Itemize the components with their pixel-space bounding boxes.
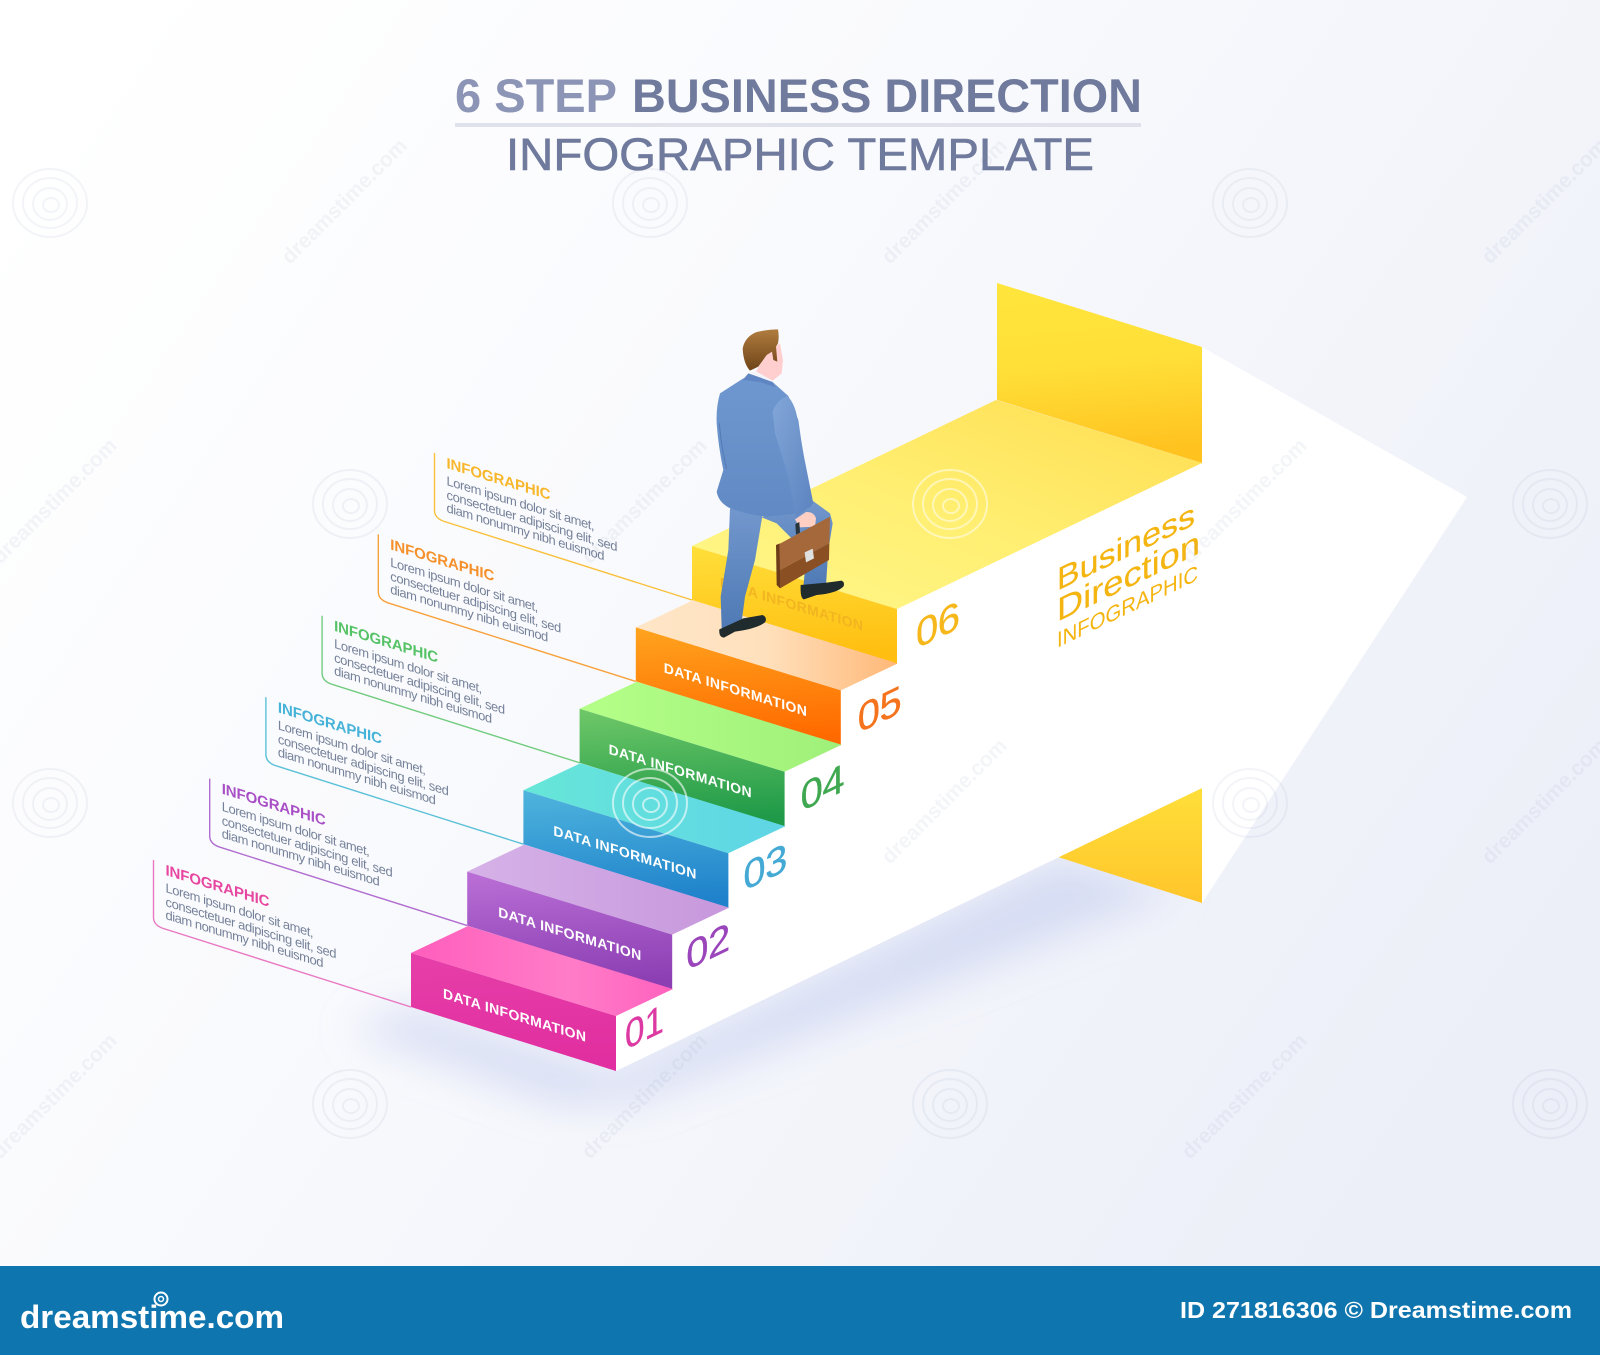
- callout 4 green: Lorem ipsum dolor sit amet,: [334, 636, 482, 696]
- briefcase: [776, 517, 830, 588]
- title: [455, 69, 1142, 180]
- watermark text: dreamstime.com: [877, 134, 1012, 269]
- watermark medallions: [13, 169, 1587, 1138]
- step 06 yellow: 06: [916, 592, 960, 658]
- jacket: [717, 378, 812, 517]
- step 03 blue: 03: [743, 834, 787, 900]
- callout 3 blue: INFOGRAPHIC: [278, 699, 382, 748]
- callout 6 yellow: diam nonummy nibh euismod: [446, 500, 604, 563]
- callout 6 yellow: INFOGRAPHIC: [446, 455, 550, 504]
- step 01 pink: DATA INFORMATION: [443, 986, 586, 1046]
- watermark text: dreamstime.com: [577, 1029, 712, 1164]
- arrow side label: Direction: [1057, 524, 1200, 630]
- white shirt collar: [747, 372, 773, 384]
- step 01 pink: [411, 926, 673, 1071]
- callout 1 pink: Lorem ipsum dolor sit amet,: [166, 880, 314, 940]
- arrow side label: Business: [1057, 496, 1195, 599]
- hair: [743, 329, 779, 371]
- footer image id: ID 271816306 © Dreamstime.com: [1180, 1297, 1572, 1323]
- neck and face: [756, 343, 783, 381]
- step 06 yellow: DATA INFORMATION: [720, 575, 863, 635]
- title line one emphasis: BUSINESS DIRECTION: [632, 69, 1142, 122]
- callout 1 pink: diam nonummy nibh euismod: [166, 907, 324, 970]
- callout 5 orange: INFOGRAPHIC: [390, 537, 494, 585]
- hand: [795, 512, 816, 527]
- footer bar: [0, 1266, 1600, 1355]
- watermark text: [0, 134, 1600, 1164]
- rear shoe: [719, 615, 766, 638]
- watermark text: dreamstime.com: [277, 134, 412, 269]
- yellow back wall: [997, 283, 1202, 463]
- watermark text: dreamstime.com: [1177, 434, 1312, 569]
- callout 5 orange: consectetuer adipiscing elit, sed: [390, 569, 561, 636]
- watermark text: dreamstime.com: [1177, 1029, 1312, 1164]
- step 05 orange: [636, 600, 902, 745]
- callout 2 purple: [210, 779, 467, 926]
- callout 4 green: diam nonummy nibh euismod: [334, 663, 492, 726]
- lower yellow arrow barb: [1058, 788, 1202, 903]
- step 02 purple: [467, 845, 730, 990]
- callout 1 pink: consectetuer adipiscing elit, sed: [166, 894, 336, 961]
- callout 1 pink: [154, 860, 411, 1007]
- callout 3 blue: consectetuer adipiscing elit, sed: [278, 731, 449, 799]
- callout 4 green: consectetuer adipiscing elit, sed: [334, 650, 505, 717]
- step 06 yellow: [692, 400, 1202, 664]
- step 03 blue: DATA INFORMATION: [553, 823, 696, 883]
- jacket collar: [743, 373, 775, 387]
- callout 6 yellow: [434, 453, 692, 600]
- callout 2 purple: diam nonummy nibh euismod: [222, 826, 380, 889]
- step 02 purple: 02: [686, 913, 730, 979]
- arrow side label: [1057, 496, 1200, 653]
- arrow side label: INFOGRAPHIC: [1057, 560, 1198, 653]
- callout 1 pink: INFOGRAPHIC: [166, 862, 270, 911]
- callout 5 orange: [378, 534, 636, 681]
- step 01 pink: 01: [625, 995, 664, 1059]
- step 05 orange: DATA INFORMATION: [664, 661, 807, 720]
- step 03 blue: [523, 763, 787, 908]
- callout 6 yellow: consectetuer adipiscing elit, sed: [446, 487, 617, 554]
- callout 2 purple: INFOGRAPHIC: [222, 781, 326, 829]
- callout 3 blue: [266, 697, 523, 844]
- callout 2 purple: Lorem ipsum dolor sit amet,: [222, 799, 370, 859]
- businessman climbing with briefcase: [717, 329, 844, 638]
- step 04 green: [580, 682, 845, 827]
- raised leg: [762, 500, 833, 587]
- callout 6 yellow: Lorem ipsum dolor sit amet,: [446, 473, 594, 533]
- callout 3 blue: diam nonummy nibh euismod: [278, 744, 436, 808]
- watermark text: dreamstime.com: [877, 734, 1012, 869]
- briefcase handle: [795, 522, 800, 535]
- white arrow body: [616, 347, 1467, 1071]
- title line one: 6 STEP: [455, 69, 617, 122]
- jacket arm seam: [719, 423, 727, 468]
- callout 5 orange: diam nonummy nibh euismod: [390, 582, 548, 645]
- soft shadow under arrow: [350, 857, 1180, 1105]
- watermark text: dreamstime.com: [577, 434, 712, 569]
- jacket sleeve: [773, 396, 813, 517]
- step 04 green: 04: [801, 755, 845, 820]
- step 05 orange: 05: [858, 676, 902, 742]
- front shoe: [801, 581, 844, 599]
- callout 2 purple: consectetuer adipiscing elit, sed: [222, 813, 393, 880]
- callout 5 orange: Lorem ipsum dolor sit amet,: [390, 555, 538, 615]
- callout 3 blue: Lorem ipsum dolor sit amet,: [278, 717, 426, 778]
- step 04 green: DATA INFORMATION: [609, 742, 752, 802]
- callout 4 green: [322, 616, 580, 763]
- footer logo: dreamstime.com: [20, 1299, 284, 1335]
- standing leg: [721, 508, 763, 628]
- title line two: INFOGRAPHIC TEMPLATE: [506, 129, 1094, 180]
- step 02 purple: DATA INFORMATION: [498, 905, 641, 964]
- callout 4 green: INFOGRAPHIC: [334, 618, 438, 667]
